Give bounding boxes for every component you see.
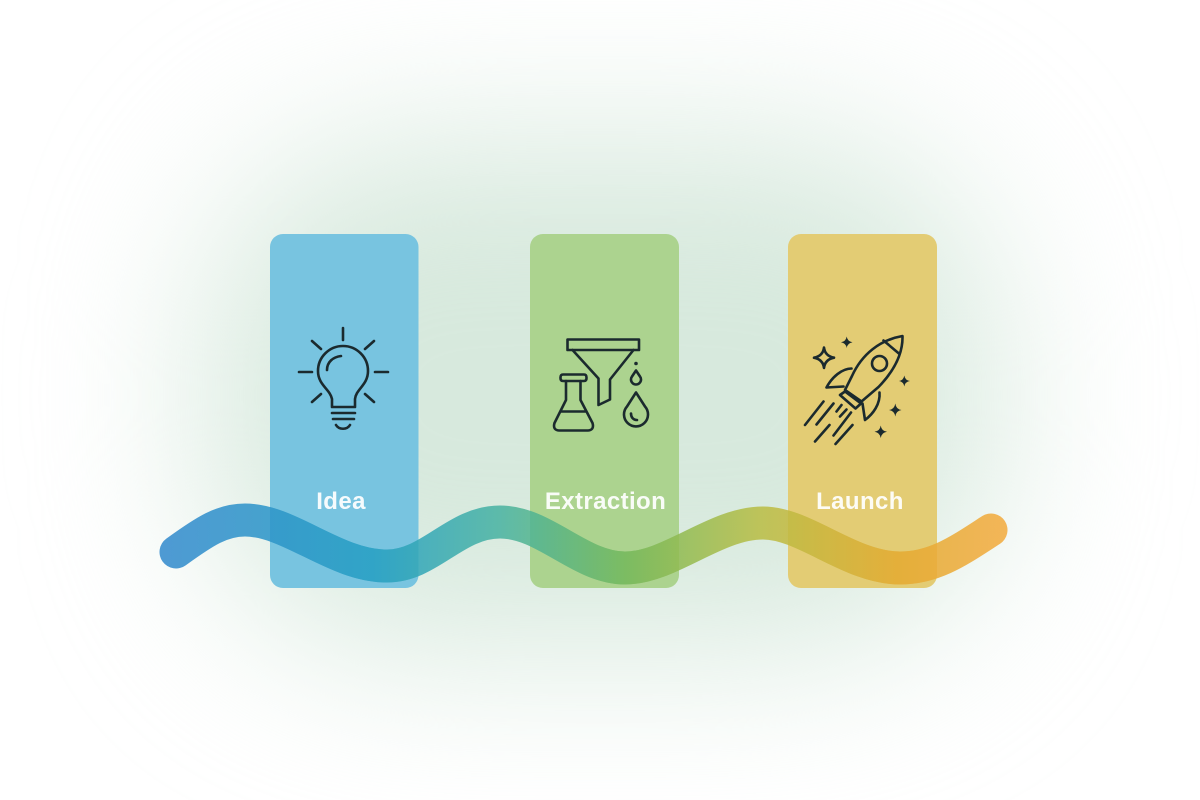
label: Launch: Launch	[816, 488, 904, 515]
card: Idea	[270, 234, 418, 588]
label: Extraction: Extraction	[545, 488, 666, 515]
label: Idea: Idea	[316, 488, 366, 515]
card: Launch	[788, 234, 937, 588]
wave ribbon	[176, 520, 991, 568]
card: Extraction	[530, 234, 679, 588]
icon: light bulb	[299, 328, 388, 429]
icon: funnel, flask and drops	[554, 340, 648, 430]
icon: rocket and stars	[805, 336, 910, 444]
